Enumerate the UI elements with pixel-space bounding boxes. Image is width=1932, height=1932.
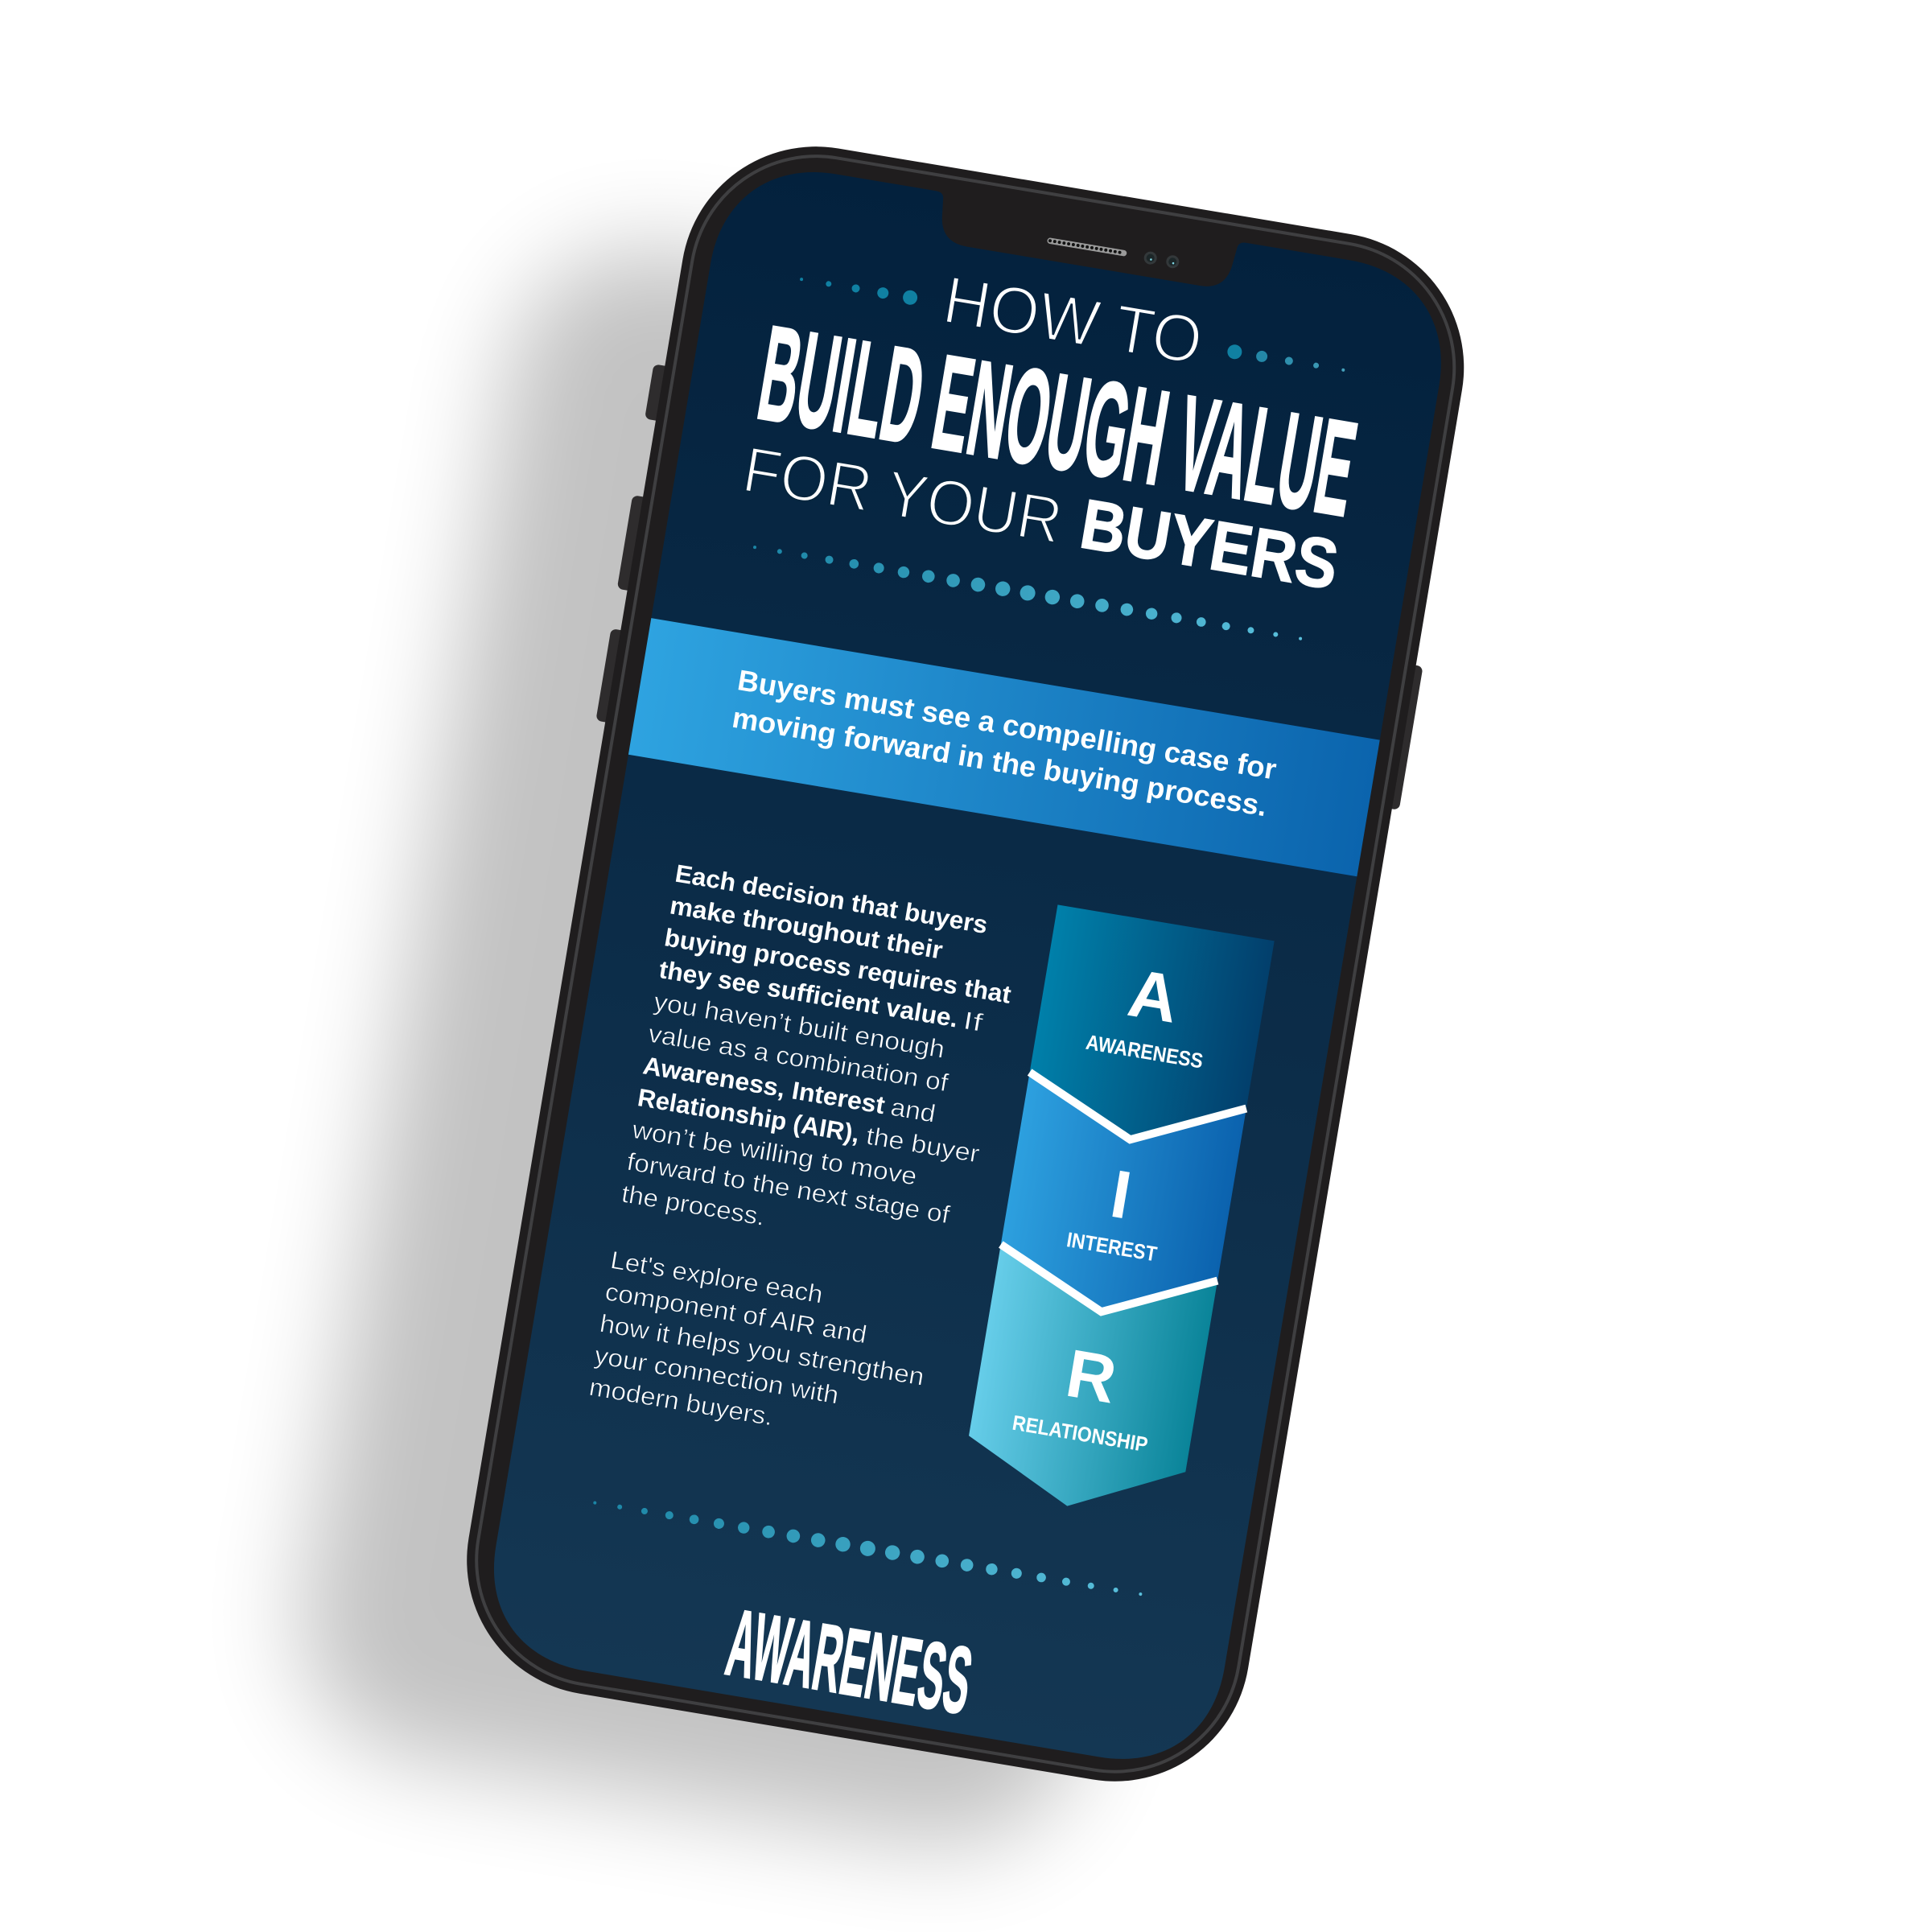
- dots left of HOW TO: [799, 272, 918, 306]
- body paragraph 1: the process.: [620, 1180, 767, 1231]
- title: [738, 234, 1376, 604]
- side button: volume down: [595, 628, 635, 724]
- body paragraph 2: your connection with: [592, 1341, 841, 1410]
- ribbon segment: A awareness: A: [1123, 954, 1184, 1037]
- body paragraph 1: Awareness, Interest: [641, 1051, 887, 1119]
- ribbon segment: R relationship: RELATIONSHIP: [1011, 1411, 1150, 1456]
- ribbon segment: I interest: INTEREST: [1065, 1227, 1159, 1266]
- body paragraph 2: how it helps you strengthen: [598, 1309, 926, 1391]
- ribbon segment: R relationship: R: [1061, 1335, 1122, 1418]
- body paragraph 1: the buyer: [864, 1122, 982, 1168]
- ribbon segment: A awareness: AWARENESS: [1084, 1030, 1205, 1073]
- side button: volume up: [617, 495, 657, 593]
- bezel highlight: [837, 166, 1353, 252]
- ribbon segment: R relationship: [960, 1244, 1217, 1524]
- blue banner: [628, 618, 1380, 876]
- side button: power: [1378, 663, 1423, 810]
- white chevron divider 1: [1021, 1072, 1246, 1158]
- AIR ribbon: [960, 904, 1275, 1524]
- body paragraph 1: and: [888, 1093, 937, 1128]
- title line: BUYERS: BUYERS: [1075, 484, 1344, 604]
- phone drop shadow: [281, 228, 1311, 1866]
- text: AWARENESS: [720, 1589, 978, 1735]
- body paragraph 1: forward to the next stage of: [625, 1147, 952, 1229]
- phone: [435, 124, 1492, 1803]
- body paragraph 2: component of AIR and: [603, 1277, 869, 1349]
- speaker grille: [1047, 237, 1127, 257]
- phone metal rim: [458, 138, 1473, 1790]
- screen: [478, 156, 1457, 1775]
- side button: silent switch: [645, 364, 678, 422]
- ribbon segment: I interest: [993, 1072, 1246, 1330]
- banner background: [628, 618, 1380, 876]
- body paragraph 1: If: [961, 1006, 985, 1037]
- body paragraph 2: Let's explore each: [608, 1246, 825, 1309]
- body paragraph 1: [619, 859, 1024, 1265]
- body paragraph 1: won’t be willing to move: [629, 1115, 919, 1191]
- title line: HOW TO: HOW TO: [938, 262, 1208, 379]
- banner text line 1: Buyers must see a compelling case for: [735, 663, 1279, 786]
- white chevron divider 2: [993, 1244, 1217, 1330]
- body paragraph 1: buying process requires that: [662, 923, 1013, 1009]
- ribbon segment: I interest: I: [1106, 1155, 1136, 1234]
- body paragraph 1: they see sufficient value.: [657, 955, 960, 1033]
- body paragraph 1: you haven’t built enough: [652, 987, 947, 1064]
- phone body: [447, 126, 1485, 1802]
- dotted divider above logo: [592, 1495, 1143, 1602]
- title line: FOR YOUR: FOR YOUR: [738, 433, 1067, 557]
- body paragraph 2: modern buyers.: [587, 1373, 775, 1431]
- ribbon segment: A awareness: [1021, 904, 1275, 1158]
- body paragraph 2: [587, 1246, 937, 1455]
- body paragraph 1: Relationship (AIR),: [636, 1083, 862, 1148]
- body paragraph 1: Each decision that buyers: [674, 859, 990, 939]
- dotted divider under title: [752, 539, 1304, 646]
- banner text line 2: moving forward in the buying process.: [730, 701, 1270, 822]
- front cameras: [1143, 250, 1180, 269]
- body paragraph 1: value as a combination of: [646, 1020, 950, 1097]
- dots right of HOW TO: [1226, 344, 1346, 377]
- body paragraph 1: make throughout their: [668, 891, 945, 965]
